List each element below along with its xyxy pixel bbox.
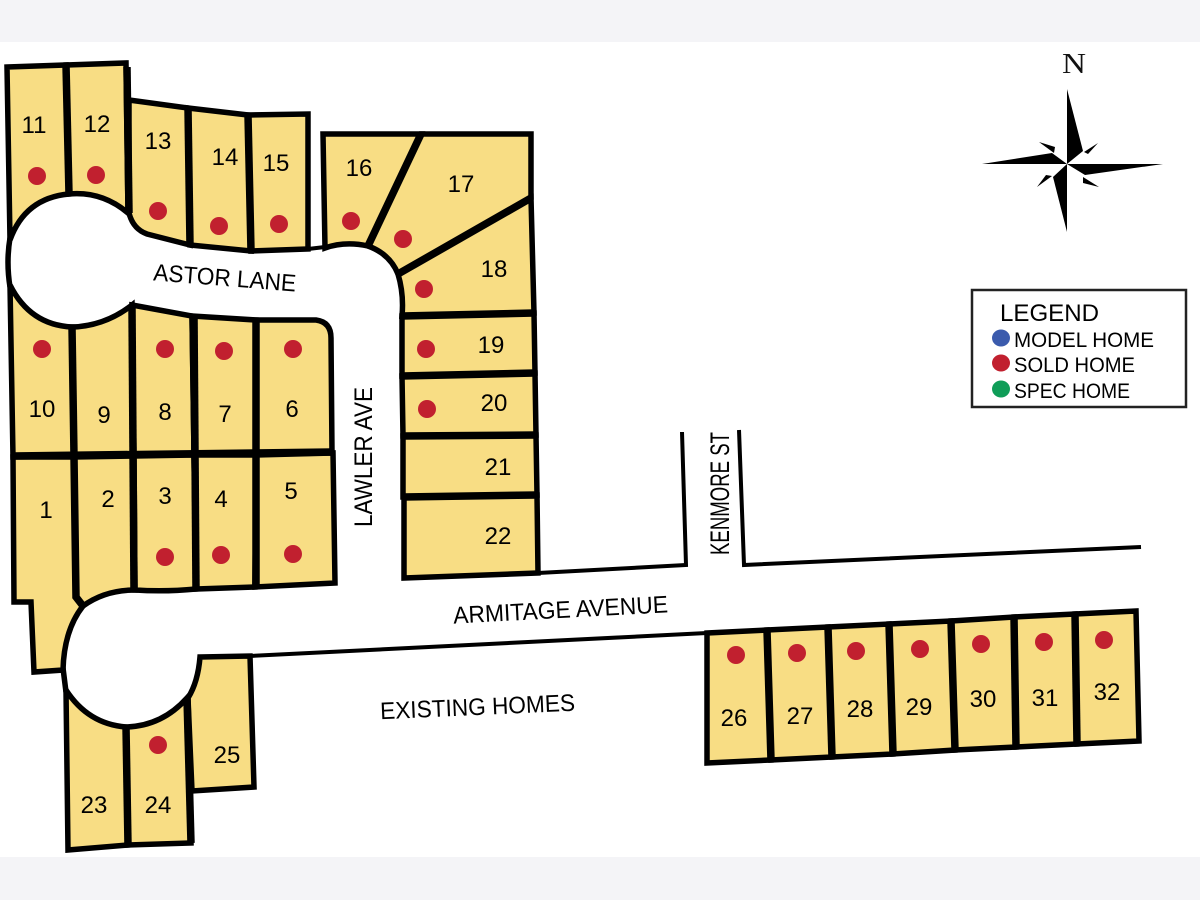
lot 23 [66,690,128,850]
lots north of Astor Lane [7,63,538,578]
lot 19: 19 [478,332,504,359]
lot 11 [7,65,69,240]
lot 18 [398,198,534,316]
lot 12: 12 [84,111,110,138]
lots south of Astor Lane [10,285,335,672]
lot 1 [13,457,83,672]
lot 27: 27 [787,703,813,730]
lot 2 [74,456,135,606]
lot 23: 23 [81,792,107,819]
lot 29 [889,621,955,754]
legend: LEGEND [1000,300,1099,327]
lot 24 [126,698,191,845]
lot 32: 32 [1094,679,1120,706]
lot 19 [402,313,535,376]
lot 26 [707,630,771,763]
legend item: model home: MODEL HOME [1014,329,1154,352]
lots around lower cul-de-sac [66,656,254,850]
legend item: spec home: SPEC HOME [1014,380,1130,403]
lot 4: 4 [214,486,228,513]
street label: Kenmore St: KENMORE ST [705,432,735,555]
lot 30 [951,617,1016,750]
lot 5 [255,453,335,587]
legend item: sold home: SOLD HOME [1014,354,1135,377]
lot 22 [404,495,538,578]
road edge lines [8,238,1141,692]
lot 21: 21 [485,454,511,481]
lot 31: 31 [1032,685,1058,712]
lot 6: 6 [285,396,299,423]
lot 10 [10,285,74,457]
lot 12 [66,63,128,213]
lot 10: 10 [29,396,55,423]
street label: Armitage Avenue: ARMITAGE AVENUE [453,591,669,630]
lot 14 [188,108,251,251]
lot 15 [248,114,308,251]
street label: Lawler Ave: LAWLER AVE [350,387,378,527]
lot 14: 14 [212,144,238,171]
lot 28: 28 [847,696,873,723]
area label: Existing Homes: EXISTING HOMES [380,690,576,725]
lot 22: 22 [485,523,511,550]
icon: compass rose: N [1062,48,1086,80]
lot 7: 7 [218,401,232,428]
icon: compass rose [982,48,1163,232]
lot 1: 1 [39,497,53,524]
lot 28 [828,624,893,757]
lot 11: 11 [22,112,46,139]
lot 17 [368,134,531,274]
lots on Armitage Avenue [707,611,1139,763]
lot 25 [188,656,254,791]
lot 15: 15 [263,150,289,177]
lot 16: 16 [346,155,372,182]
lot 4 [194,455,256,589]
lot 7 [192,316,256,454]
lot 26: 26 [721,705,747,732]
lot 24: 24 [145,792,171,819]
lot 20: 20 [481,390,507,417]
lot 17: 17 [448,171,474,198]
lot 21 [403,435,537,497]
lot 31 [1014,614,1077,747]
lot 13: 13 [145,128,171,155]
lot 18: 18 [481,256,507,283]
lot 29: 29 [906,694,932,721]
lot 20 [402,373,536,436]
lot 8: 8 [158,399,172,426]
heavy lot divider lines [13,65,1077,845]
lot 27 [767,627,832,760]
lot 9: 9 [97,402,111,429]
lot 3: 3 [158,483,172,510]
lot 5: 5 [284,478,298,505]
lot 6 [256,320,332,453]
lot 25: 25 [214,742,240,769]
lot 2: 2 [101,486,115,513]
lot 30: 30 [970,686,996,713]
lot 3 [134,455,196,591]
legend [972,290,1186,407]
street label: Astor Lane: ASTOR LANE [152,259,297,298]
lot 9 [72,305,134,456]
lot 32 [1075,611,1139,744]
lot 16 [323,134,421,248]
lot 8 [132,305,194,456]
lot 13 [129,100,190,245]
